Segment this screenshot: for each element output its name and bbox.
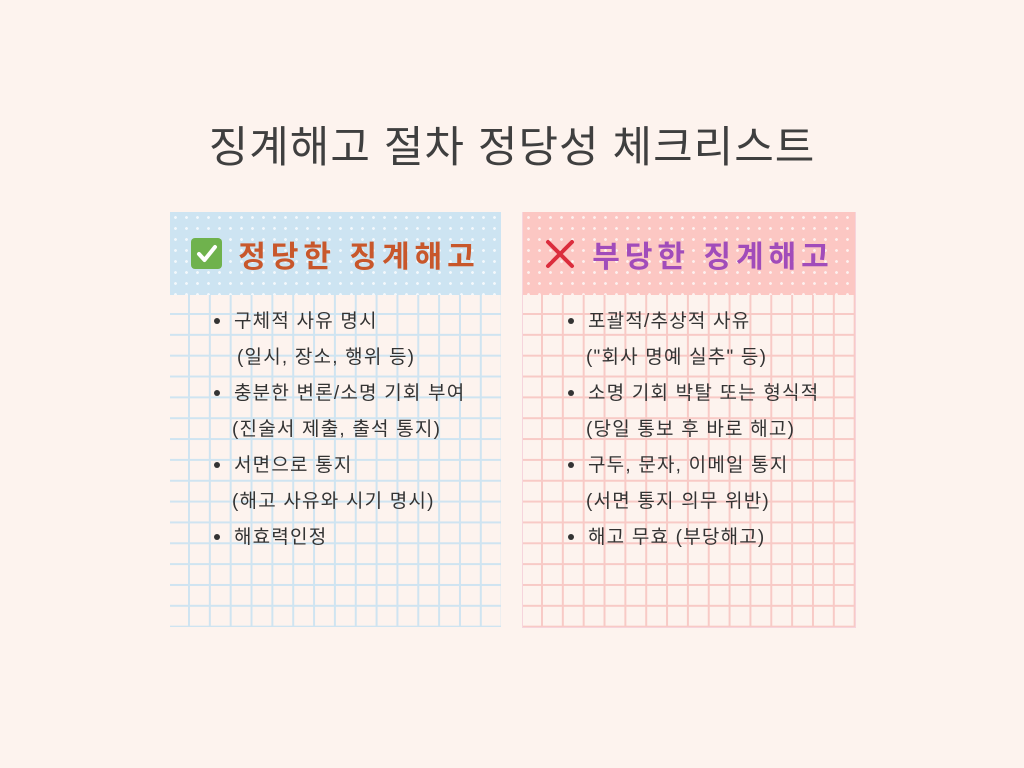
list: unjustified (523, 295, 855, 627)
list: justified: (일시, 장소, 행위 등) (237, 347, 415, 368)
list: unjustified: (당일 통보 후 바로 해고) (586, 419, 795, 440)
header: justified (170, 212, 501, 295)
header: unjustified (523, 212, 855, 295)
list: justified: 해효력인정 (234, 527, 327, 548)
list: justified (170, 295, 501, 627)
icon: cross (546, 240, 574, 268)
list: justified: 서면으로 통지 (234, 455, 353, 476)
list: justified: 충분한 변론/소명 기회 부여 (234, 383, 465, 404)
list: justified: (진술서 제출, 출석 통지) (232, 419, 441, 440)
panel: justified (170, 212, 501, 627)
header: unjustified: 부당한 징계해고 (592, 240, 834, 274)
panel: unjustified (522, 212, 856, 628)
list: unjustified: 포괄적/추상적 사유 (588, 311, 750, 332)
list: unjustified: 소명 기회 박탈 또는 형식적 (588, 383, 819, 404)
title: 징계해고 절차 정당성 체크리스트 (209, 124, 815, 172)
list: justified: 구체적 사유 명시 (234, 311, 378, 332)
list: unjustified: (서면 통지 의무 위반) (586, 491, 770, 512)
header: justified: 정당한 징계해고 (238, 240, 480, 274)
list: unjustified: 구두, 문자, 이메일 통지 (588, 455, 789, 476)
list: unjustified: ("회사 명예 실추" 등) (586, 347, 767, 368)
list: justified: (해고 사유와 시기 명시) (232, 491, 435, 512)
list: unjustified: 해고 무효 (부당해고) (588, 527, 765, 548)
icon: check (191, 238, 222, 269)
